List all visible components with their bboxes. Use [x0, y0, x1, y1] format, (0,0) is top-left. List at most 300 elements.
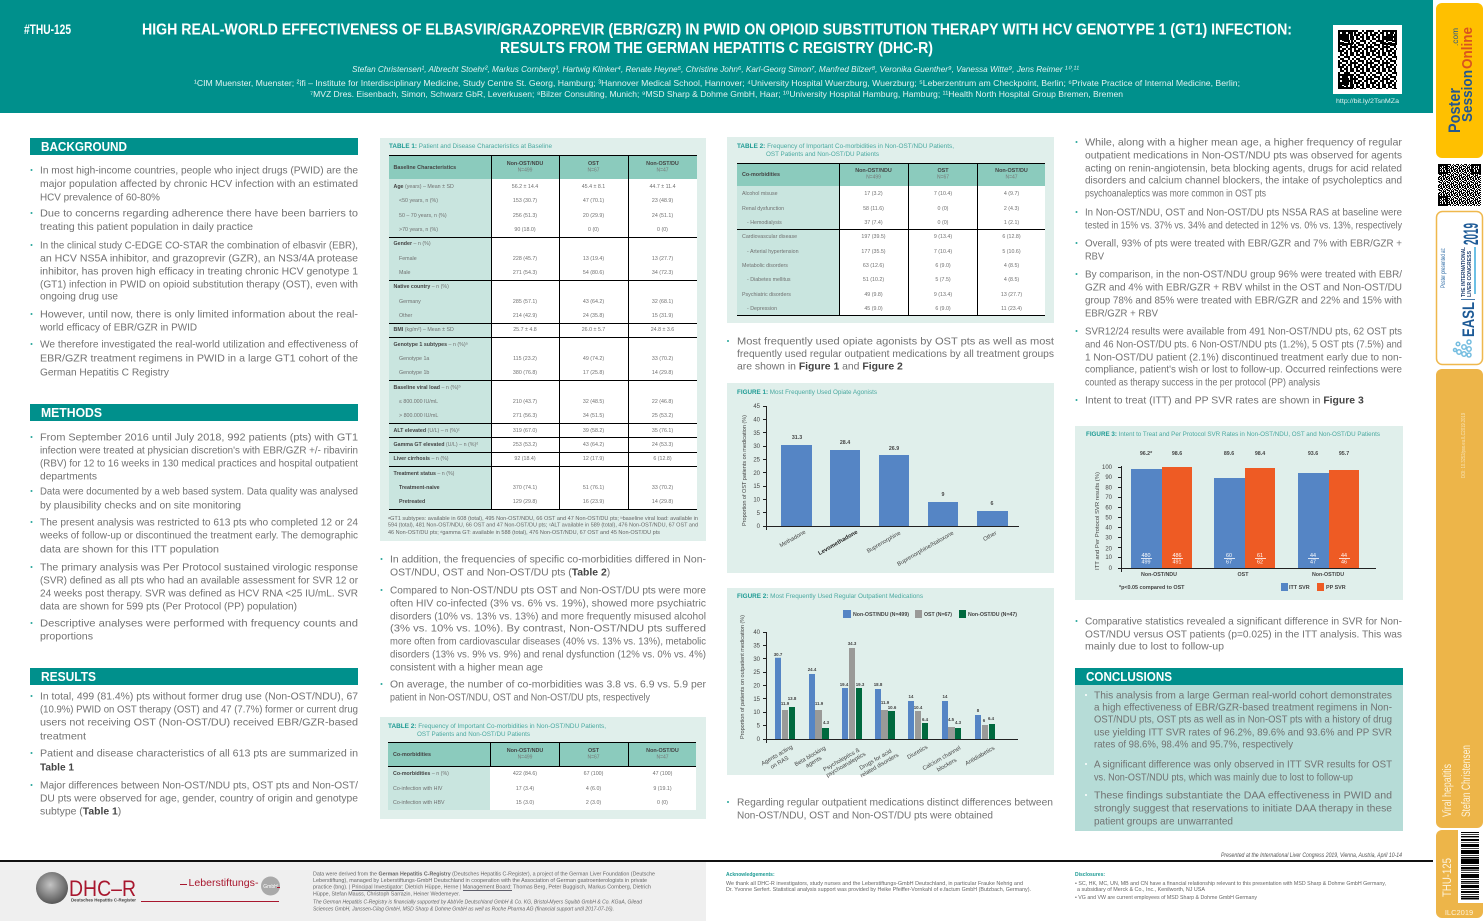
text block: acknowledgements: Acknowledgements:: [726, 872, 775, 878]
table 1 rows: Genotype 1a: [399, 356, 429, 362]
table 2 lower text: 0 (0): [657, 800, 668, 806]
text block: background bullets: German Hepatitis C Registry: [40, 368, 170, 378]
text block: results bullets: Major differences between Non-OST/NDU pts, OST pts and Non-OST/: [40, 780, 358, 792]
bar chart: outpatient medications: 10: [753, 710, 761, 716]
bar chart: SVR rates: 10: [1105, 555, 1113, 561]
text block: right column results: 1 Non-OST/DU patient (2.1%) discontinued treatment early due to non-: [1085, 352, 1402, 364]
bar chart: outpatient medications: related disorders: [860, 752, 900, 779]
table 1 rows: 380 (76.8): [513, 370, 537, 376]
text block: background bullets: However, until now, there is only limited information about the real-: [40, 310, 358, 320]
title: [142, 22, 1292, 57]
table 1 rows: 14 (29.8): [652, 370, 673, 376]
table 2 lower text: Co-infection with HIV: [393, 786, 443, 792]
bar chart: opiate agonists: 20: [753, 471, 761, 477]
text block: background bullets: major population affected by chronic HCV infection with an estimated: [40, 179, 358, 190]
table 1 rows: 14 (29.8): [652, 499, 673, 505]
figure 3 legend: ITT SVR: [1289, 585, 1310, 591]
bar chart: opiate agonists: Buprenorphine: [866, 531, 902, 555]
table 2 upper text: N=47: [1005, 174, 1018, 180]
affiliations: ¹CIM Muenster, Muenster; ²ifi – Institute for Interdisciplinary Medicine, Study Centre St. Georg, Hamburg; ³Hannover Medical School, Hannover; ⁴University Hospital Wuerzburg, Wuerzburg; ⁵Leberzentrum am Checkpoint, Berlin; ⁶Private Practice of Internal Medicine, Berlin;: [194, 78, 1240, 88]
text block: disclosures: Disclosures:: [1075, 872, 1105, 878]
table 1 rows: 33 (70.2): [652, 356, 673, 362]
bar chart: outpatient medications: Agents acting: [761, 745, 794, 767]
table 1 rows: 271 (56.3): [513, 413, 537, 419]
table 1 rows: Liver cirrhosis – n (%): [394, 456, 449, 462]
bar chart: opiate agonists: 25: [753, 458, 761, 464]
text block: acknowledgements: We thank all DHC-R investigators, study nurses and the Leberstiftungs-GmbH Deutschland, in particular Frauke Nehrig and: [726, 881, 1023, 887]
heading: conclusions: CONCLUSIONS: [1086, 670, 1172, 684]
heading: methods: METHODS: [41, 406, 102, 420]
bar chart: opiate agonists: 9: [942, 492, 945, 498]
bar chart: opiate agonists: 26.9: [889, 446, 899, 452]
table 2 upper text: 37 (7.4): [864, 220, 883, 226]
bar chart: SVR rates: 96.2*: [1140, 451, 1153, 457]
text block: right column results: counted as therapy success in the per protocol (PP) analysis: [1085, 378, 1320, 388]
bar chart: SVR rates: 491: [1172, 560, 1182, 566]
sidebar: EASL badge: THE INTERNATIONAL: [1461, 247, 1467, 297]
bar chart: outpatient medications: 40: [753, 630, 761, 636]
text block: right column results: While, along with a higher mean age, a higher frequency of regular: [1085, 138, 1403, 148]
table 1 rows: 25.7 ± 4.8: [513, 327, 537, 333]
text block: figure 2 comment: Non-OST/NDU, OST and Non-OST/DU pts were obtained: [737, 810, 993, 822]
QR link: http://bit.ly/2TsnMZa: [1336, 98, 1400, 105]
text block: right column results: RBV: [1085, 252, 1104, 262]
bar chart: outpatient medications: blockers: [936, 757, 958, 774]
sidebar: QR code: [1438, 164, 1481, 206]
sidebar: poster ID and barcode: [1436, 830, 1483, 918]
bar chart: opiate agonists: Methadone: [779, 530, 807, 549]
table 1 header: Baseline Characteristics: [394, 165, 456, 171]
sidebar: EASL badge: [1436, 212, 1483, 364]
text block: co-morbidity results: often HIV co-infected (3% vs. 6% vs. 19%), showed more psychiatric: [390, 598, 706, 610]
table 2 lower title: TABLE 2: Frequency of Important Co-morbidities in Non-OST/NDU Patients,: [388, 723, 606, 730]
table 2 upper text: Metabolic disorders: [742, 263, 788, 269]
text block: results bullets: (10.9%) PWID on OST therapy (OST) and 47 (7.7%) former or current drug: [40, 704, 358, 716]
bar chart: outpatient medications: 0: [757, 737, 761, 743]
text block: conclusions bullets: strongly suggest that reservations to initiate DAA therapy in these: [1094, 804, 1392, 814]
sidebar: PosterSessionOnline badge: Poster: [1445, 88, 1464, 133]
table 1 rows: Other: [399, 313, 412, 319]
table 1 rows: 24 (53.3): [652, 442, 673, 448]
table 1 rows: <50 years, n (%): [399, 198, 438, 204]
bar chart: opiate agonists: 10: [753, 498, 761, 504]
text block: results bullets: Table 1: [40, 762, 74, 774]
table 2 lower grid: [388, 742, 696, 810]
bar chart: SVR rates: 90: [1105, 475, 1113, 481]
sidebar: EASL badge: Poster presented at:: [1440, 248, 1447, 288]
sidebar: PosterSessionOnline badge: .com: [1451, 28, 1460, 46]
heading: background: BACKGROUND: [41, 140, 127, 154]
table 1 rows: 13 (27.7): [652, 256, 673, 262]
text block: co-morbidity results: (3% vs. 10% vs. 10%). By contrast, Non-OST/NDU pts suffered: [390, 624, 706, 634]
sidebar: poster ID and barcode: THU-125: [1442, 858, 1454, 897]
text block: methods bullets: From September 2016 until July 2018, 992 patients (pts) with GT1: [40, 432, 358, 444]
table 1 rows: 214 (42.9): [513, 313, 537, 319]
table 2 upper text: 17 (3.2): [864, 191, 883, 197]
sidebar: PosterSessionOnline badge: Session: [1459, 70, 1476, 122]
text block: conclusions bullets: vs. Non-OST/NDU pts, which was mainly due to lost to follow-up: [1094, 772, 1353, 784]
text block: conclusions bullets: [1085, 690, 1393, 828]
table 2 upper text: Psychiatric disorders: [742, 292, 791, 298]
sidebar: DOI panel: Viral hepatitis: [1442, 764, 1454, 817]
text block: methods bullets: data are shown for this ITT population: [40, 544, 219, 556]
text block: figure intro: [727, 336, 1054, 372]
text block: background bullets: Due to concerns regarding adherence there have been barriers to: [40, 208, 358, 220]
table 2 upper text: Non-OST/NDU: [855, 168, 892, 174]
bar chart: SVR rates: 46: [1341, 560, 1347, 566]
text block: co-morbidity results: disorders (13% vs. 9% vs. 9%) and renal dysfunction (12% vs. 0% vs. 4%): [390, 650, 706, 660]
table 2 upper text: - Depression: [747, 306, 777, 312]
table 2 upper text: 51 (10.2): [863, 277, 884, 283]
table 1 footnote: 594 (total), 481 Non-OST/NDU, 66 OST and 47 Non-OST/DU pts; ᶜALT available in 589 (total), 476 Non-OST/NDU, 67 OST and: [388, 522, 698, 528]
bar chart: outpatient medications: 30: [753, 657, 761, 663]
bar chart: outpatient medications: 19.4: [840, 682, 849, 687]
table 1 rows: 25 (53.2): [652, 413, 673, 419]
bar chart: SVR rates: 30: [1105, 536, 1113, 542]
table 1 header: N=499: [518, 168, 533, 174]
bar chart: outpatient medications: 6: [983, 718, 986, 723]
table 1 rows: Age (years) – Mean ± SD: [394, 184, 454, 190]
text block: right column results: In Non-OST/NDU, OST and Non-OST/DU pts NS5A RAS at baseline were: [1085, 208, 1402, 218]
table 2 upper text: 5 (10.6): [1002, 249, 1021, 255]
bar chart: SVR rates: ITT and Per Protocol SVR results (%): [1095, 472, 1101, 570]
figure 2 legend: [843, 610, 1017, 618]
heading: results: [30, 668, 358, 685]
bar chart: outpatient medications: 4.3: [823, 720, 830, 725]
text block: registry description: Hüppe, Stefan Mauss, Christoph Sarrazin, Heiner Wedemeyer.: [313, 892, 460, 898]
sidebar: DOI panel: DOI: 10.3252/pso.eu.ILC2019.2019: [1461, 413, 1467, 478]
bar chart: opiate agonists: 28.4: [840, 440, 850, 446]
text block: conclusions bullets: rates of 98.6%, 98.4% and 95.7%, respectively: [1094, 740, 1294, 750]
table 1 rows: 271 (54.3): [513, 270, 537, 276]
table 2 upper text: 6 (9.0): [935, 306, 951, 312]
table 1 rows: 20 (29.9): [583, 213, 604, 219]
table 1 rows: 39 (58.2): [583, 428, 604, 434]
bar chart: opiate agonists: Levomethadone: [818, 529, 860, 557]
text block: figure intro: are shown in Figure 1 and Figure 2: [737, 362, 903, 372]
text block: results bullets: subtype (Table 1): [40, 806, 121, 818]
table 2 upper text: 0 (0): [938, 206, 949, 212]
table 1 grid: [389, 155, 697, 510]
text block: right column results: GZR and 4% with EBR/GZR + RBV whilst in the OST and Non-OST/DU: [1085, 282, 1402, 294]
text block: right column results: acting on renin-angiotensin, beta blocking agents, drugs for acid related: [1085, 164, 1402, 174]
text block: background bullets: world efficacy of EBR/GZR in PWID: [39, 322, 197, 334]
text block: right column results: outpatient medications in Non-OST/NDU pts was observed for agents: [1085, 150, 1402, 162]
bar chart: SVR rates: 499: [1142, 560, 1150, 566]
table 2 lower text: OST: [588, 748, 600, 754]
table 1 rows: 24 (51.1): [652, 213, 673, 219]
table 1 rows: 56.2 ± 14.4: [512, 184, 538, 190]
text block: comparative statistics: [1076, 616, 1402, 652]
panel: results: [30, 668, 358, 818]
table 1 rows: ≤ 800.000 IU/mL: [399, 399, 438, 405]
text block: co-morbidity results: On average, the number of co-morbidities was 3.8 vs. 6.9 vs. 5.9 per: [390, 680, 707, 690]
bar chart: opiate agonists: 5: [757, 511, 761, 517]
QR code: [1333, 25, 1402, 94]
text block: background bullets: In the clinical study C-EDGE CO-STAR the combination of elbasvir (EBR),: [40, 240, 358, 252]
bar chart: outpatient medications: 30.7: [774, 652, 783, 657]
table 2 lower title: OST Patients and Non-OST/DU Patients: [417, 731, 530, 738]
bar chart: SVR rates: 80: [1105, 486, 1113, 492]
panel: figure 1: [727, 383, 1054, 573]
bar chart: opiate agonists: Proportion of OST patients on medication (%): [742, 415, 748, 526]
table 2 upper text: 4 (9.7): [1004, 191, 1019, 197]
table 1 footnote: ᵃGT1 subtypes: available in 608 (total), 495 Non-OST/NDU, 66 OST and 47 Non-OST/DU pts; ᵇbaseline viral load: available in: [388, 516, 698, 522]
text block: methods bullets: Descriptive analyses were performed with frequency counts and: [40, 618, 358, 630]
table 1 rows: 115 (23.2): [513, 356, 537, 362]
bar chart: opiate agonists: 40: [753, 418, 761, 424]
text block: right column results: disorders and calcium channel blockers, the intake of psycholeptics and: [1085, 176, 1402, 186]
bar chart: outpatient medications: 11.9: [881, 700, 890, 705]
figure 3 note: *p<0.05 compared to OST: [1119, 585, 1185, 591]
table 1 rows: Female: [399, 256, 417, 262]
table 2 upper text: [742, 168, 1028, 312]
table 2 upper text: 0 (0): [938, 220, 949, 226]
text block: results bullets: users not receiving OST (Non-OST/DU) received EBR/GZR-based: [40, 718, 358, 728]
text block: registry description: Data were derived from the German Hepatitis C-Registry (Deutsches Hepatitis C-Register), a project of the German Liver Foundation (Deutsche: [313, 872, 655, 878]
table 1 rows: 32 (48.5): [583, 399, 604, 405]
text block: right column results: compliance, patient's wish or lost to follow-up. Occurred reinfections were: [1085, 364, 1402, 376]
text block: disclosures: [1075, 872, 1386, 901]
table 1 rows: Baseline viral load – n (%)ᵇ: [394, 385, 461, 391]
bar chart: outpatient medications: Psycholeptics &: [823, 747, 861, 773]
text block: background bullets: HCV prevalence of 60-80%: [40, 192, 160, 204]
bar chart: opiate agonists: Buprenorphine/Naloxone: [896, 531, 955, 568]
table 1 rows: 319 (67.0): [513, 428, 537, 434]
sidebar: PosterSessionOnline badge: [1436, 3, 1483, 158]
table 1 rows: 13 (19.4): [583, 256, 604, 262]
bar chart: outpatient medications: 6.4: [922, 717, 929, 722]
sidebar: poster ID and barcode: ILC2019: [1445, 908, 1473, 917]
text block: co-morbidity results: Compared to Non-OST/NDU pts OST and Non-OST/DU pts were more: [390, 586, 706, 596]
text block: right column results: Overall, 93% of pts were treated with EBR/GZR and 7% with EBR/GZR +: [1085, 238, 1402, 250]
text block: results bullets: In total, 499 (81.4%) pts without former drug use (Non-OST/NDU), 67: [40, 692, 358, 702]
poster number: #THU-125: [24, 21, 71, 37]
bar chart: outpatient medications: 6.4: [988, 716, 995, 721]
table 1 rows: 15 (31.9): [652, 313, 673, 319]
bar chart: SVR rates: Non-OST/NDU: [1141, 572, 1177, 578]
text block: background bullets: (GT1) infection in PWID on opioid substitution therapy (OST), even with: [40, 280, 358, 290]
table 1 rows: 44.7 ± 11.4: [649, 184, 676, 190]
bar chart: outpatient medications: Proportion of patients on outpatient medication (%): [740, 615, 746, 739]
table 2 upper text: 1 (2.1): [1004, 220, 1019, 226]
bar chart: outpatient medications: 11.9: [815, 701, 824, 706]
panel: figure 2: [727, 588, 1054, 779]
text block: conclusions bullets: a high effectiveness of EBR/GZR-based treatment regimens in Non-: [1094, 702, 1392, 714]
bar chart: SVR rates: 20: [1105, 546, 1113, 552]
table 2 upper text: 177 (35.5): [861, 249, 886, 255]
table 2 upper text: 63 (12.6): [863, 263, 884, 269]
panel: table 1: [380, 138, 706, 541]
logo: DHC-R: DHC–R: [69, 876, 136, 901]
text block: right column results: and 46 Non-OST/DU pts. 6 Non-OST/NDU pts (1.2%), 5 OST pts (7.5%) and: [1085, 340, 1402, 350]
text block: background bullets: EBR/GZR treatment regimens in PWID in a large GT1 cohort of the: [40, 354, 358, 364]
panel: conclusions: [1075, 668, 1403, 831]
text block: co-morbidity results: In addition, the frequencies of specific co-morbidities differed in Non-: [390, 554, 706, 566]
table 1 footnote: [388, 516, 698, 536]
table 1 rows: 49 (74.2): [583, 356, 604, 362]
bar chart: outpatient medications: 20: [753, 684, 761, 690]
text block: background bullets: inhibitor, has proven high efficacy in treating chronic HCV genotype 1: [40, 266, 358, 278]
table 1 rows: Male: [399, 270, 411, 276]
table 1 rows: 92 (18.4): [514, 456, 536, 462]
table 2 lower text: 4 (6.0): [586, 786, 601, 792]
bar chart: opiate agonists: [742, 404, 1019, 568]
table 1 title: TABLE 1: Patient and Disease Characteristics at Baseline: [389, 143, 553, 150]
table 2 upper title: TABLE 2: Frequency of Important Co-morbidities in Non-OST/NDU Patients,: [737, 143, 954, 150]
logo: Leberstiftung: [180, 876, 280, 896]
text block: methods bullets: by plausibility checks and on site monitoring: [40, 500, 241, 512]
text block: results bullets: Patient and disease characteristics of all 613 pts are summarized in: [40, 748, 358, 760]
table 2 lower text: Co-morbidities: [393, 752, 431, 758]
table 1 rows: 24.8 ± 3.6: [651, 327, 674, 333]
heading: background: [30, 138, 358, 155]
table 2 upper text: Cardiovascular disease: [742, 234, 797, 240]
text block: co-morbidity results: disorders (10% vs. 13% vs. 13%) and more frequently misused alcohol: [390, 612, 706, 622]
bar chart: SVR rates: 44: [1341, 553, 1347, 559]
text block: conclusions bullets: A significant difference was only observed in ITT SVR results for OST: [1094, 760, 1393, 770]
bar chart: outpatient medications: 25: [753, 670, 761, 676]
text block: methods bullets: [30, 432, 359, 642]
table 1 rows: 26.0 ± 5.7: [582, 327, 605, 333]
table 1 rows: > 800.000 IU/mL: [399, 413, 438, 419]
table 2 upper text: 7 (10.4): [934, 249, 952, 255]
table 2 upper text: 58 (11.6): [863, 206, 884, 212]
text block: methods bullets: The present analysis was restricted to 613 pts who completed 12 or 24: [40, 518, 358, 528]
text block: conclusions bullets: use yielding ITT SVR rates of 96.2%, 89.6% and 93.6% and PP SVR: [1094, 728, 1392, 738]
bar chart: opiate agonists: 6: [991, 501, 994, 507]
bar chart: outpatient medications: 34.3: [848, 641, 857, 646]
table 1 header: OST: [588, 161, 600, 167]
text block: methods bullets: infection were treated at physician discretion's with EBR/GZR +/- ribavirin: [40, 446, 358, 456]
text block: disclosures: • SC, HK, MC, UN, MB and CN have a financial relationship relevant to this presentation with MSD Sharp & Dohme GmbH Germany,: [1075, 881, 1386, 887]
sidebar: PosterSessionOnline badge: Online: [1459, 27, 1476, 69]
table 2 upper text: 11 (23.4): [1001, 306, 1022, 312]
text block: registry description: [313, 872, 655, 912]
text block: results bullets: [30, 692, 358, 818]
table 2 lower text: Non-OST/NDU: [507, 748, 543, 754]
table 1 rows: Treatment status – n (%): [394, 471, 455, 477]
figure 3 legend: PP SVR: [1326, 585, 1346, 591]
text block: background bullets: an HCV NS5A inhibitor, and grazoprevir (GZR), an NS3/4A protease: [40, 254, 358, 264]
bar chart: SVR rates: 61: [1257, 553, 1263, 559]
table 1 rows: 6 (12.8): [653, 456, 672, 462]
bar chart: outpatient medications: 35: [753, 644, 761, 650]
figure 2 title: FIGURE 2: Most Frequently Used Regular Outpatient Medications: [737, 593, 923, 600]
table 2 upper text: Co-morbidities: [742, 172, 780, 178]
table 1 rows: 50 – 70 years, n (%): [399, 213, 447, 219]
header band: [0, 0, 1433, 113]
table 1 rows: 24 (35.8): [583, 313, 604, 319]
table 1 rows: [394, 184, 676, 505]
table 2 lower text: Non-OST/DU: [646, 748, 679, 754]
panel: table 2 upper: [727, 137, 1054, 323]
text block: methods bullets: Data were documented by a web based system. Data quality was analysed: [40, 486, 358, 498]
table 2 lower text: 67 (100): [584, 771, 604, 777]
text block: results bullets: treatment: [40, 732, 86, 742]
table 1 rows: 12 (17.9): [583, 456, 604, 462]
text block: methods bullets: (SVR) defined as all pts who had an available assessment for SVR 12 or: [40, 576, 359, 586]
table 1 rows: 43 (64.2): [583, 442, 604, 448]
bar chart: outpatient medications: 11.9: [781, 701, 790, 706]
bar chart: SVR rates: 70: [1105, 495, 1113, 501]
bar chart: opiate agonists: 45: [753, 404, 761, 410]
bar chart: SVR rates: 100: [1102, 465, 1113, 471]
text block: figure intro: frequently used regular outpatient medications by all treatment groups: [737, 349, 1054, 360]
table 1 rows: 256 (51.3): [513, 213, 537, 219]
bar chart: SVR rates: 62: [1257, 560, 1263, 566]
table 1 header: Non-OST/DU: [646, 161, 679, 167]
bar chart: opiate agonists: 30: [753, 444, 761, 450]
table 1 rows: 33 (70.2): [652, 485, 673, 491]
table 1 rows: 22 (46.8): [652, 399, 673, 405]
text block: registry description: The German Hepatitis C-Registry is financially supported by AbbVie Deutschland GmbH & Co. KG, Bristol-Myers Squibb GmbH & Co. KGaA, Gilead: [313, 900, 642, 906]
text block: co-morbidity results: [380, 554, 707, 704]
text block: conclusions bullets: OST/NDU pts, OST pts as well as in Non-OST pts with a history of drug: [1094, 714, 1392, 726]
presented-at note: Presented at the International Liver Congress 2019, Vienna, Austria, April 10-14: [1221, 853, 1403, 859]
table 1 rows: 34 (72.3): [652, 270, 673, 276]
bar chart: opiate agonists: 15: [753, 484, 761, 490]
text block: disclosures: a subsidiary of Merck & Co., Inc., Kenilworth, NJ USA: [1077, 887, 1206, 893]
text block: right column results: psychoanaleptics was more common in OST pts: [1085, 188, 1266, 200]
sidebar: EASL badge: 2019: [1460, 223, 1483, 245]
text block: co-morbidity results: patient in Non-OST/NDU, OST and Non-OST/DU pts, respectively: [390, 692, 651, 704]
footer rule: [0, 860, 1433, 862]
panel: figure 3: [1075, 426, 1403, 600]
logo: DHC-R: [36, 872, 279, 904]
figure 3 legend: [1281, 583, 1346, 591]
table 2 upper text: - Diabetes mellitus: [747, 277, 791, 283]
bar chart: opiate agonists: 35: [753, 431, 761, 437]
table 2 upper text: 6 (12.8): [1002, 234, 1021, 240]
bar chart: opiate agonists: 0: [757, 524, 761, 530]
table 2 upper text: Alcohol misuse: [742, 191, 778, 197]
table 2 lower text: Co-infection with HBV: [393, 800, 445, 806]
table 2 upper grid: [737, 163, 1045, 316]
text block: methods bullets: The primary analysis was Per Protocol sustained virologic response: [40, 562, 358, 574]
table 2 upper text: 4 (8.5): [1004, 277, 1019, 283]
bar chart: outpatient medications: Antidiabetics: [965, 745, 996, 767]
bar chart: SVR rates: 47: [1310, 560, 1316, 566]
sidebar: DOI panel: Stefan Christensen: [1461, 745, 1473, 817]
table 1 rows: 0 (0): [657, 227, 668, 233]
table 1 rows: 43 (64.2): [583, 299, 604, 305]
logo: DHC-R: Deutsches Hepatitis C-Register: [71, 898, 136, 902]
text block: co-morbidity results: more often from cardiovascular diseases (40% vs. 13% vs. 13%), metabolic: [390, 636, 706, 648]
table 2 upper title: [737, 143, 954, 158]
logo: Leberstiftung: Leberstiftungs-: [188, 877, 259, 889]
bar chart: SVR rates: 480: [1142, 553, 1150, 559]
text block: results bullets: DU pts were observed for age, gender, country of origin and genotype: [40, 794, 358, 804]
heading: results: RESULTS: [41, 670, 96, 684]
bar chart: outpatient medications: 4.3: [955, 720, 962, 725]
table 2 upper text: Non-OST/DU: [995, 168, 1028, 174]
text block: right column results: tested in 15% vs. 37% vs. 34% and detected in 12% vs. 0% vs. 13%, respectively: [1085, 220, 1403, 232]
icon: EASL dots: [1454, 340, 1471, 357]
table 1 rows: >70 years, n (%): [399, 227, 438, 233]
table 2 lower text: 17 (3.4): [516, 786, 534, 792]
text block: acknowledgements: [726, 872, 1031, 893]
text block: right column results: EBR/GZR + RBV: [1085, 308, 1158, 320]
table 1 rows: ALT elevated (U/L) – n (%)ᶜ: [394, 428, 460, 434]
heading: conclusions: [1075, 668, 1403, 685]
bar chart: outpatient medications: Diuretics: [906, 744, 929, 761]
text block: methods bullets: proportions: [40, 632, 93, 642]
bar chart: outpatient medications: [740, 615, 1018, 779]
bar chart: outpatient medications: 4.5: [948, 717, 955, 722]
text block: background bullets: In most high-income countries, people who inject drugs (PWID) are the: [40, 166, 358, 176]
table 1 rows: 45.4 ± 8.1: [582, 184, 605, 190]
